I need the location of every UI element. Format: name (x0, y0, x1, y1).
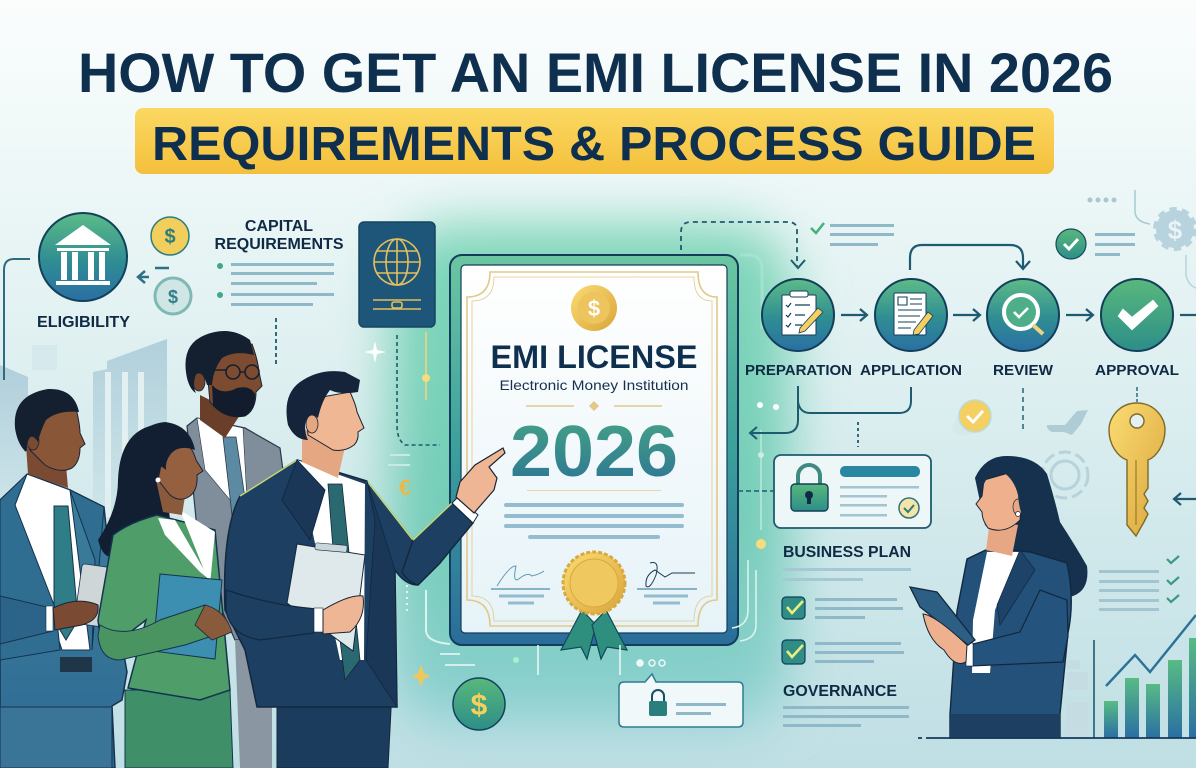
icon: yellow check (952, 400, 991, 436)
security card (774, 455, 931, 528)
person: woman with tablet (910, 456, 1087, 738)
dotted connector to card (857, 422, 859, 447)
person: left man (0, 389, 127, 768)
dashed connector to preparation (681, 222, 805, 268)
connector to key (1136, 387, 1138, 402)
icon: gear (1088, 190, 1196, 288)
step: preparation (745, 279, 852, 379)
icon: gear: $ (1168, 215, 1183, 245)
certificate title: EMI LICENSE (490, 339, 698, 375)
gold seal (563, 552, 625, 614)
step: review (987, 279, 1059, 379)
icon: check mark (1119, 301, 1157, 329)
icon: eligibility bank (39, 213, 127, 301)
step: application (860, 279, 962, 379)
icon: form (894, 293, 933, 335)
faded icons (1042, 410, 1088, 498)
arrow: preparation to application (841, 309, 867, 321)
icon: dollar token: $ (471, 689, 488, 722)
side checklist (1099, 556, 1179, 611)
certificate (450, 255, 738, 659)
circuit decoration left of certificate (364, 332, 450, 687)
dashed connector from review (1022, 388, 1024, 432)
label: application: APPLICATION (860, 362, 962, 379)
capital requirements heading: CAPITAL (245, 218, 313, 235)
certificate dollar medal (571, 285, 617, 331)
capital requirements heading (214, 218, 344, 253)
dashed connector (275, 318, 277, 366)
pointing arm and hand (402, 448, 505, 585)
icon: passport (359, 222, 435, 327)
chat bubble with lock (619, 674, 743, 727)
governance lines (783, 706, 909, 727)
icon: gold key (1109, 403, 1165, 536)
arrow: application to review (953, 309, 980, 321)
checklist top (811, 223, 894, 246)
arrow: into key (1174, 493, 1196, 505)
subtitle band: REQUIREMENTS & PROCESS GUIDE (152, 118, 1036, 171)
icon: clipboard (782, 291, 823, 335)
ground line (918, 737, 1196, 739)
label: review: REVIEW (993, 362, 1054, 379)
certificate subtitle: Electronic Money Institution (500, 377, 688, 393)
growth chart (1094, 615, 1196, 738)
icon: dollar token (453, 678, 505, 730)
certificate text lines (504, 490, 684, 539)
dots under certificate (440, 645, 665, 675)
left signature (491, 566, 550, 603)
title: HOW TO GET AN EMI LICENSE IN 2026 (78, 41, 1113, 104)
step: approval (1095, 279, 1179, 379)
arrow: coin to eligibility (138, 268, 169, 283)
certificate year: 2026 (510, 412, 678, 492)
label: approval: APPROVAL (1095, 362, 1179, 379)
checklist items (782, 597, 904, 664)
business plan lines (783, 568, 911, 581)
ribbon (561, 610, 627, 659)
person: front man pointing (225, 371, 440, 768)
icon: coins (151, 217, 191, 314)
certificate gold border (467, 272, 717, 626)
person: woman in green (98, 422, 233, 768)
dashed link from certificate to card (738, 490, 774, 492)
capital requirements text lines (217, 263, 334, 306)
person: man with glasses at back (185, 331, 287, 768)
connector: eligibility line (4, 259, 30, 380)
circuit decoration left of certificate: € (399, 475, 411, 500)
business plan heading: BUSINESS PLAN (783, 544, 911, 561)
decorative city skyline (0, 339, 167, 520)
faded blocks (1067, 660, 1088, 735)
circuit decoration right of certificate (732, 255, 779, 641)
check badge with lines (1056, 229, 1135, 259)
arrow: approval exit (1180, 314, 1196, 316)
certificate dollar medal: $ (588, 296, 600, 321)
certificate ornament (526, 402, 662, 410)
icon: padlock (791, 465, 828, 511)
icon: coins: $ (168, 287, 178, 307)
arrow: review to approval (1066, 309, 1093, 321)
icon: coins: $ (164, 226, 176, 248)
right signature (637, 562, 697, 603)
connector: steps to certificate (750, 386, 911, 439)
connector: application to review (910, 245, 1030, 270)
eligibility label: ELIGIBILITY (37, 314, 130, 331)
label: preparation: PREPARATION (745, 362, 852, 379)
icon: magnifier (1004, 295, 1043, 334)
governance heading: GOVERNANCE (783, 683, 897, 700)
capital requirements heading: REQUIREMENTS (214, 236, 344, 253)
